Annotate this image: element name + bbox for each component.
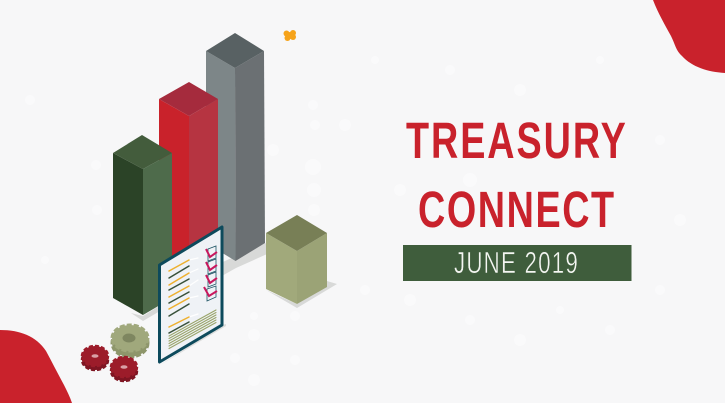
check boxes (204, 246, 217, 301)
title: Treasury Connect: TREASURY (406, 111, 626, 169)
decorative red blob: bottom left (0, 330, 72, 403)
date banner: JUNE 2019 (454, 245, 578, 280)
column: dark green (113, 135, 172, 315)
decorative red blob: top right (653, 0, 725, 73)
icon: olive gear (112, 325, 148, 357)
icon: red gear left (82, 346, 108, 370)
column: olive cube (266, 215, 327, 304)
date banner (403, 245, 632, 281)
column: gray (206, 33, 265, 261)
bar chart: isometric columns (113, 33, 337, 321)
column: red (159, 82, 218, 290)
title: Treasury Connect (406, 111, 626, 238)
shadows on the floor (131, 243, 337, 321)
icon: orange flower (284, 30, 296, 41)
icon: checklist clipboard (160, 227, 226, 365)
checklist text lines (169, 258, 216, 348)
title: Treasury Connect: CONNECT (418, 180, 614, 238)
icon: red gear right (111, 357, 137, 381)
